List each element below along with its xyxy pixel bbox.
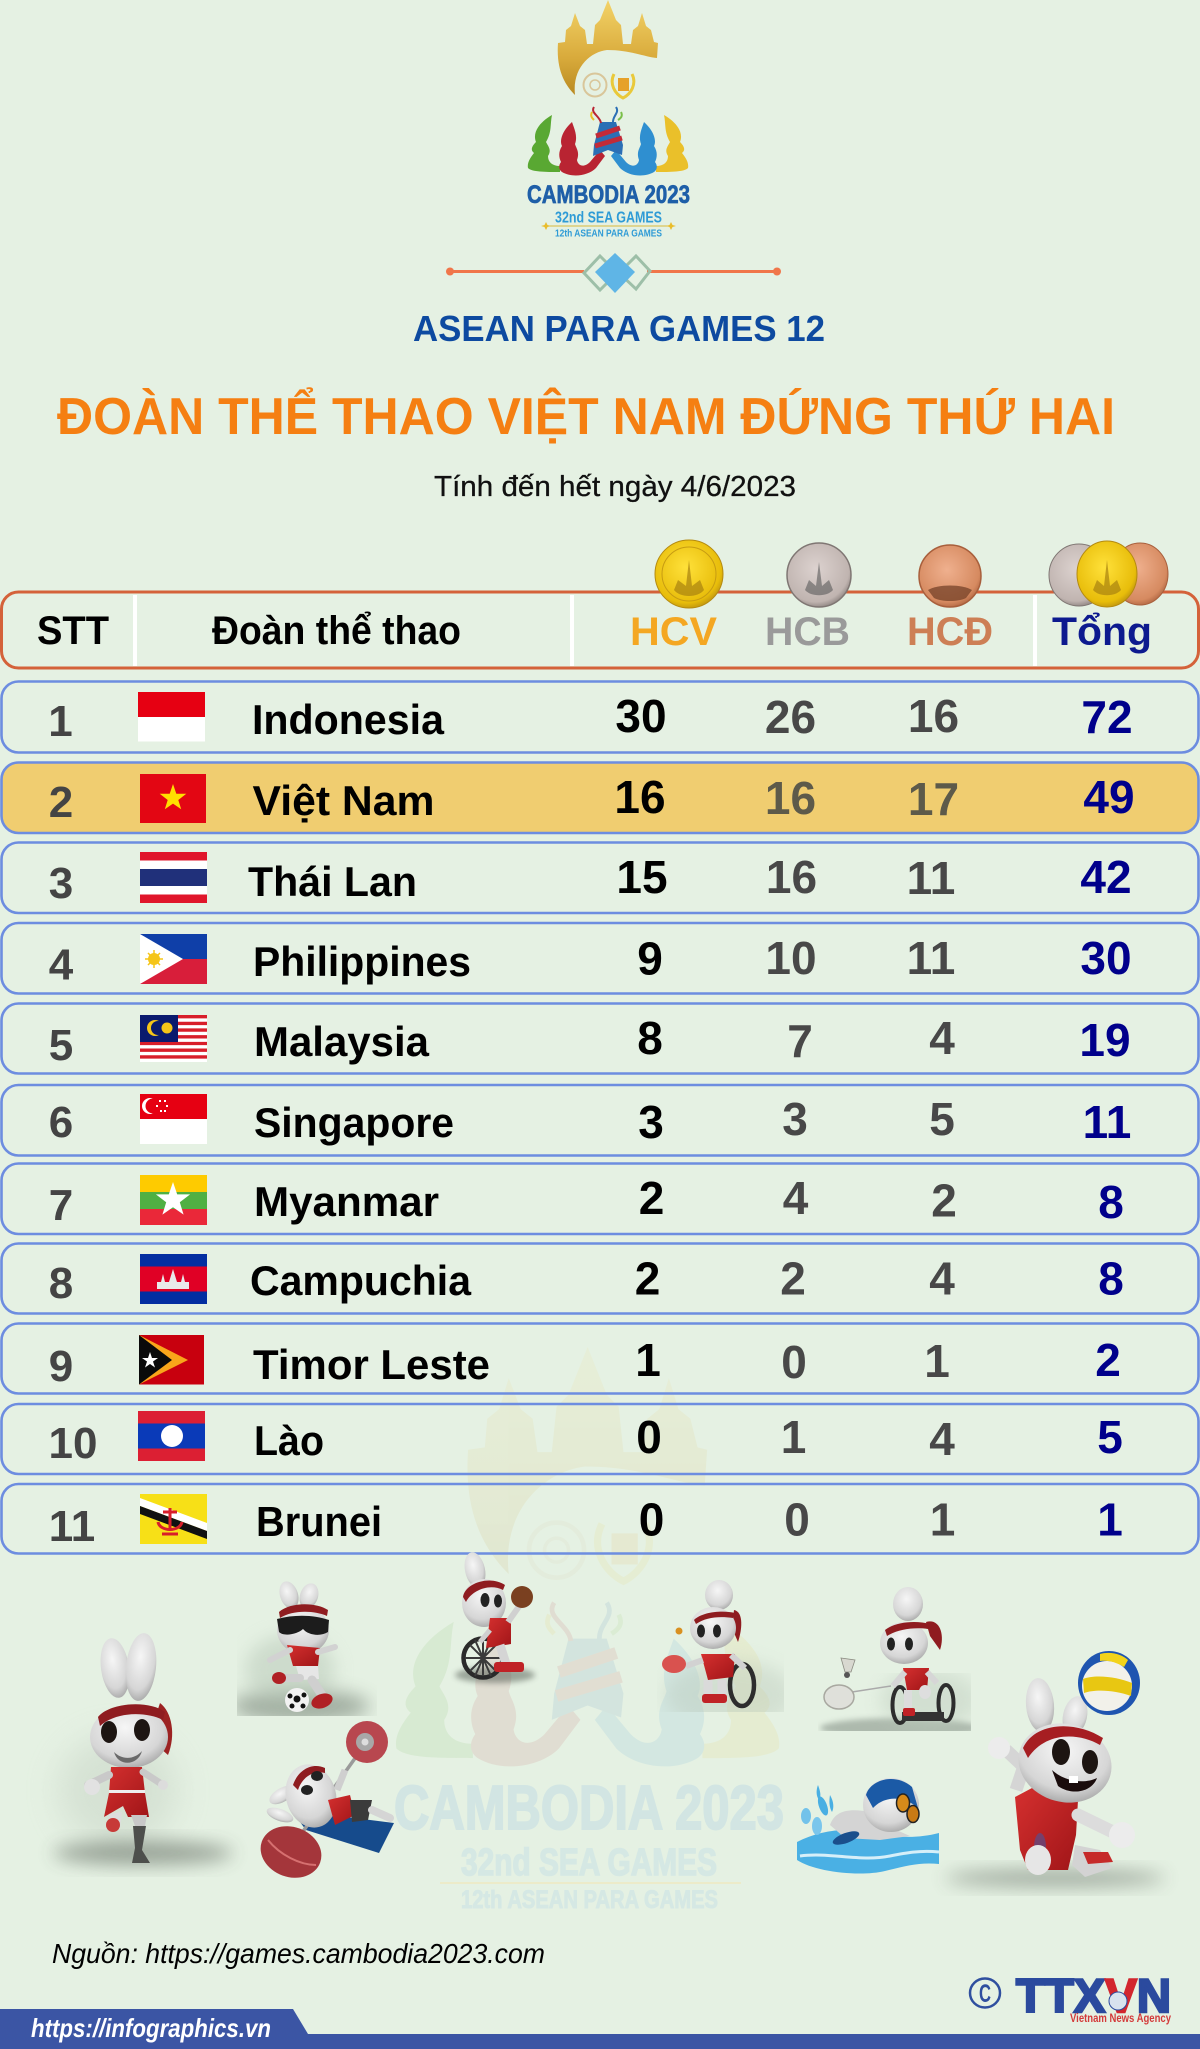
- mascot: blind football: [230, 1579, 370, 1722]
- table header: STT: [37, 609, 109, 653]
- row 6: Singapore: 3: [782, 1093, 808, 1145]
- row 3: Thái Lan: 15: [616, 851, 668, 903]
- row 4: Philippines: 30: [1080, 932, 1132, 984]
- row 6: Singapore: 6: [49, 1098, 73, 1147]
- watermark logo: 32nd SEA GAMES: [461, 1842, 717, 1884]
- row 11: Brunei: Brunei: [256, 1498, 382, 1545]
- row 2: Việt Nam (highlighted): 16: [614, 771, 666, 823]
- mascot: volleyball: [945, 1651, 1165, 1887]
- footer bar: [0, 2009, 1200, 2049]
- table header: [2, 592, 1198, 668]
- row 1: Indonesia: 72: [1081, 691, 1133, 743]
- flag: Campuchia: [140, 1254, 207, 1304]
- row 4: Philippines: 11: [907, 932, 955, 984]
- row 5: Malaysia: [2, 1004, 1198, 1074]
- flag: Brunei: [140, 1494, 207, 1544]
- subtitle: event name: ASEAN PARA GAMES 12: [413, 308, 825, 349]
- row 3: Thái Lan: 42: [1080, 851, 1132, 903]
- row 7: Myanmar: 8: [1098, 1176, 1124, 1228]
- row 7: Myanmar: 4: [783, 1172, 809, 1224]
- agency logo: TTXVN: TTXVN: [1016, 1969, 1171, 2022]
- row 7: Myanmar: Myanmar: [254, 1178, 439, 1225]
- row 11: Brunei: 1: [1097, 1494, 1123, 1546]
- watermark logo: CAMBODIA 2023: [394, 1774, 784, 1843]
- row 7: Myanmar: [2, 1164, 1198, 1234]
- flag: Myanmar: [140, 1175, 207, 1225]
- row 9: Timor Leste: [2, 1324, 1198, 1394]
- agency logo: TTXVN: Vietnam News Agency: [1070, 2013, 1171, 2025]
- flag: Thái Lan: [140, 852, 207, 903]
- medal group: total: [1049, 541, 1168, 607]
- medal: silver: [787, 543, 851, 607]
- mascot: table tennis: [662, 1580, 784, 1712]
- mascot: badminton: [820, 1587, 980, 1738]
- agency logo: TTXVN: C: [979, 1980, 991, 2008]
- row 10: Lào: 1: [781, 1411, 806, 1463]
- row 1: Indonesia: 16: [908, 690, 959, 742]
- row 3: Thái Lan: Thái Lan: [248, 858, 417, 905]
- event logo: 12th ASEAN PARA GAMES: [555, 228, 662, 240]
- flag: Timor Leste: [139, 1335, 204, 1384]
- row 11: Brunei: 11: [49, 1502, 95, 1551]
- row 8: Campuchia: 8: [1098, 1252, 1124, 1304]
- mascot: swimmer: [797, 1774, 939, 1874]
- flag: Singapore: [140, 1094, 207, 1144]
- row 7: Myanmar: 2: [639, 1172, 664, 1224]
- event logo: [527, 0, 690, 240]
- row 5: Malaysia: Malaysia: [254, 1018, 430, 1065]
- row 2: Việt Nam (highlighted): 2: [49, 778, 73, 827]
- row 4: Philippines: 4: [49, 940, 74, 990]
- medal: bronze: [919, 545, 981, 607]
- row 9: Timor Leste: 2: [1095, 1334, 1121, 1386]
- row 5: Malaysia: 4: [929, 1012, 955, 1064]
- row 11: Brunei: 0: [784, 1494, 810, 1546]
- row 10: Lào: [2, 1404, 1198, 1474]
- date line: Tính đến hết ngày 4/6/2023: [434, 471, 796, 503]
- watermark logo: 12th ASEAN PARA GAMES: [461, 1886, 718, 1914]
- row 8: Campuchia: 2: [635, 1252, 660, 1304]
- row 5: Malaysia: 5: [49, 1021, 73, 1070]
- row 9: Timor Leste: 9: [49, 1342, 73, 1391]
- row 6: Singapore: [2, 1085, 1198, 1156]
- ornament divider: [446, 253, 781, 293]
- footer bar: https://infographics.vn: [31, 2013, 271, 2043]
- source note: Nguồn: https://games.cambodia2023.com: [52, 1938, 545, 1969]
- mascot: runner: [53, 1632, 233, 1865]
- event logo: CAMBODIA 2023: [527, 181, 690, 209]
- row 7: Myanmar: 2: [931, 1174, 957, 1226]
- row 4: Philippines: Philippines: [253, 938, 471, 985]
- row 10: Lào: 5: [1097, 1411, 1123, 1463]
- row 2: Việt Nam (highlighted): 17: [908, 773, 959, 825]
- flag: Lào: [138, 1411, 205, 1461]
- mascot: wheelchair basketball: [455, 1550, 535, 1683]
- row 3: Thái Lan: 3: [49, 859, 73, 908]
- flag: Philippines: [140, 934, 207, 984]
- table header: Tổng: [1052, 610, 1152, 654]
- row 10: Lào: 0: [636, 1411, 662, 1463]
- row 6: Singapore: 11: [1083, 1096, 1131, 1148]
- row 7: Myanmar: 7: [49, 1181, 73, 1230]
- row 6: Singapore: Singapore: [254, 1099, 454, 1146]
- row 5: Malaysia: 7: [787, 1015, 813, 1067]
- table header: HCB: [765, 610, 850, 654]
- flag: Malaysia: [140, 1015, 207, 1062]
- watermark logo: [394, 1347, 784, 1914]
- row 4: Philippines: 10: [765, 932, 817, 984]
- row 1: Indonesia: [2, 682, 1198, 752]
- mascot: weightlifter: [253, 1721, 394, 1886]
- event logo: 32nd SEA GAMES: [555, 210, 662, 226]
- row 9: Timor Leste: 1: [924, 1335, 950, 1387]
- table header: Đoàn thể thao: [212, 609, 461, 653]
- row 6: Singapore: 5: [929, 1093, 955, 1145]
- row 8: Campuchia: 2: [780, 1252, 806, 1304]
- row 3: Thái Lan: [2, 842, 1198, 913]
- row 4: Philippines: 9: [637, 932, 663, 984]
- row 8: Campuchia: Campuchia: [250, 1257, 472, 1304]
- row 2: Việt Nam (highlighted): [2, 762, 1198, 833]
- row 1: Indonesia: 26: [765, 691, 816, 743]
- row 3: Thái Lan: 16: [766, 851, 817, 903]
- row 10: Lào: 4: [929, 1413, 955, 1465]
- row 10: Lào: 10: [49, 1419, 97, 1468]
- row 9: Timor Leste: Timor Leste: [253, 1341, 490, 1388]
- row 11: Brunei: [2, 1484, 1198, 1554]
- row 1: Indonesia: Indonesia: [252, 696, 445, 743]
- row 9: Timor Leste: 0: [781, 1336, 807, 1388]
- row 5: Malaysia: 19: [1079, 1014, 1131, 1066]
- table header: HCĐ: [907, 610, 993, 654]
- row 1: Indonesia: 30: [615, 690, 667, 742]
- row 11: Brunei: 1: [930, 1494, 955, 1546]
- row 9: Timor Leste: 1: [635, 1334, 661, 1386]
- table header: HCV: [630, 610, 717, 654]
- row 1: Indonesia: 1: [48, 697, 73, 746]
- row 2: Việt Nam (highlighted): 16: [765, 772, 816, 824]
- row 11: Brunei: 0: [639, 1494, 664, 1546]
- main title: ĐOÀN THỂ THAO VIỆT NAM ĐỨNG THỨ HAI: [57, 387, 1115, 446]
- flag: Indonesia: [138, 692, 205, 742]
- row 3: Thái Lan: 11: [907, 852, 955, 904]
- row 10: Lào: Lào: [254, 1417, 324, 1464]
- row 8: Campuchia: 8: [49, 1259, 73, 1308]
- row 5: Malaysia: 8: [637, 1012, 663, 1064]
- row 2: Việt Nam (highlighted): 49: [1083, 771, 1135, 823]
- row 2: Việt Nam (highlighted): Việt Nam: [252, 777, 434, 824]
- row 4: Philippines: [2, 923, 1198, 994]
- row 8: Campuchia: 4: [929, 1252, 955, 1304]
- row 6: Singapore: 3: [638, 1096, 664, 1148]
- medal: gold: [655, 540, 723, 608]
- row 8: Campuchia: [2, 1244, 1198, 1314]
- flag: Việt Nam: [140, 774, 206, 823]
